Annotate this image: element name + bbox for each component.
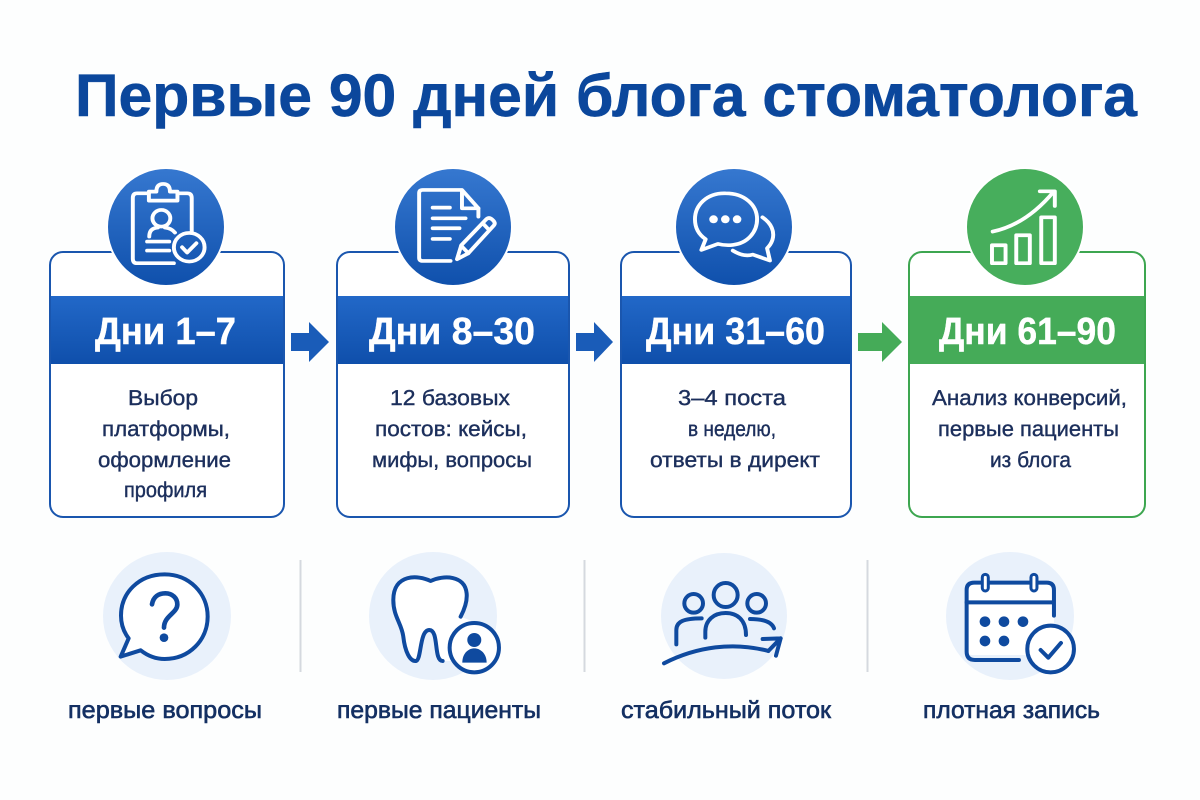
text: step 2: 12 базовых [390, 386, 510, 410]
panel: days 1-7 [50, 252, 284, 517]
icon: tooth with person [393, 577, 499, 672]
outcome: first patients [337, 552, 541, 724]
text: step 4: Анализ конверсий, [932, 386, 1127, 410]
heading band: days 31-60: Дни 31–60 [646, 311, 825, 353]
text: step 1: профиля [124, 478, 207, 502]
text: step 4: из блога [990, 448, 1071, 472]
card frame [621, 252, 851, 517]
heading band: days 61-90 [910, 296, 1144, 364]
heading band: days 1-7 [51, 296, 283, 364]
text: step 1: оформление [98, 448, 231, 472]
heading band: days 8-30 [338, 296, 568, 364]
icon: people with rising arrow [664, 583, 781, 663]
panel: days 61-90 [909, 252, 1145, 517]
label: первые пациенты [337, 697, 541, 724]
icon: question bubble [121, 574, 208, 659]
text: step 4 [932, 386, 1127, 472]
icon: chat bubbles [675, 168, 793, 286]
arrow 3 [858, 322, 902, 362]
text: step 3: в неделю, [688, 417, 776, 441]
card frame [337, 252, 569, 517]
outcome: full schedule [923, 552, 1100, 724]
title: Первые 90 дней блога стоматолога [75, 62, 1138, 129]
label: стабильный поток [621, 697, 832, 724]
arrow 2 [576, 322, 613, 362]
heading band: days 61-90: Дни 61–90 [939, 311, 1116, 353]
text: step 2: постов: кейсы, [375, 417, 527, 441]
card frame [909, 252, 1145, 517]
outcome: steady flow [621, 553, 832, 724]
heading band: days 31-60 [622, 296, 850, 364]
arrow 1 [291, 322, 329, 362]
panel: days 8-30 [337, 252, 569, 517]
heading band: days 1-7: Дни 1–7 [95, 311, 236, 353]
text: step 1: Выбор [128, 386, 198, 410]
text: step 2: мифы, вопросы [372, 448, 532, 472]
text: step 3 [650, 386, 820, 472]
label: плотная запись [923, 697, 1100, 724]
heading band: days 8-30: Дни 8–30 [369, 311, 535, 353]
card frame [50, 252, 284, 517]
panel: days 31-60 [621, 252, 851, 517]
dividers [300, 560, 868, 672]
icon: document and pencil [394, 168, 512, 286]
icon: calendar with check [967, 574, 1074, 672]
icon: clipboard with profile [107, 168, 225, 286]
outcome: first questions [68, 552, 262, 724]
text: step 2 [372, 386, 532, 472]
text: step 3: ответы в директ [650, 448, 820, 472]
text: step 4: первые пациенты [938, 417, 1119, 441]
label: первые вопросы [68, 697, 262, 724]
icon: growth chart [966, 168, 1084, 286]
text: step 3: 3–4 поста [678, 386, 786, 410]
text: step 1 [98, 386, 231, 502]
text: step 1: платформы, [102, 417, 230, 441]
